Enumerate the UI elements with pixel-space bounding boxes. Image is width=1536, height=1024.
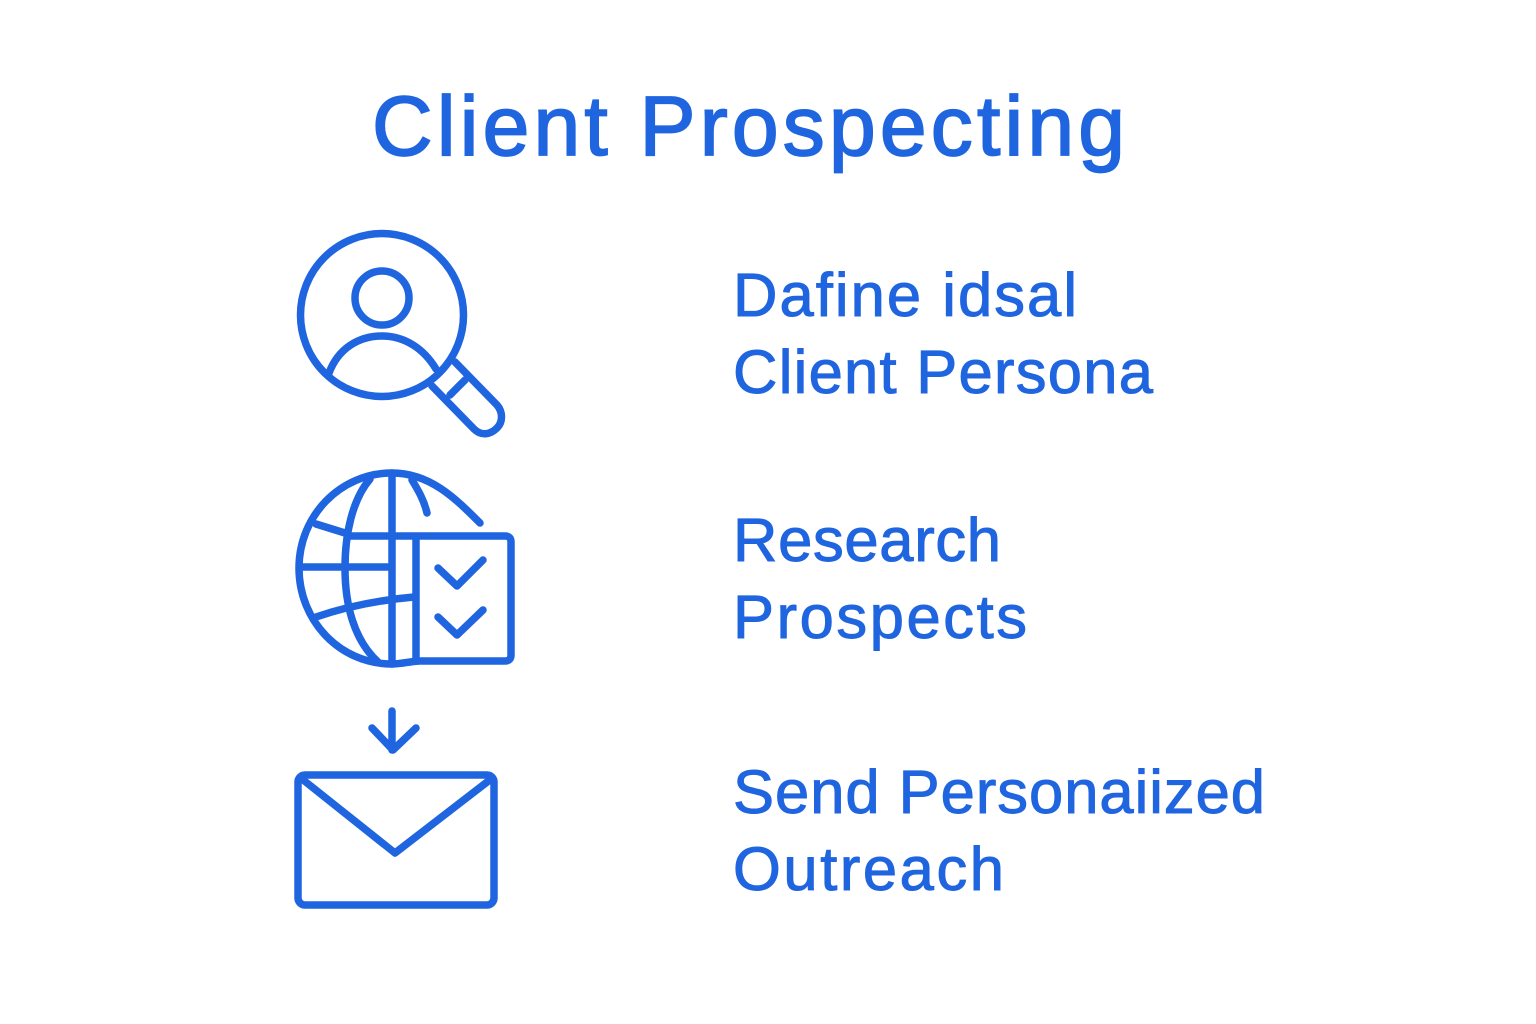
label: research prospects: Prospects	[733, 583, 1027, 652]
label: send personalized outreach: Send Personaiized	[733, 758, 1265, 827]
icon: envelope	[298, 775, 494, 905]
label: send personalized outreach	[733, 758, 1265, 904]
title: Client Prospecting	[372, 79, 1125, 173]
icon: person in magnifying glass	[300, 234, 502, 434]
label: define ideal client persona: Client Persona	[733, 338, 1154, 407]
label: define ideal client persona: Dafine idsal	[733, 261, 1077, 330]
label: send personalized outreach: Outreach	[733, 835, 1004, 904]
icon: globe with checklist	[299, 473, 511, 664]
label: research prospects: Research	[733, 506, 1001, 575]
label: define ideal client persona	[733, 261, 1154, 407]
arrow: down to envelope	[372, 711, 416, 750]
label: research prospects	[733, 506, 1027, 652]
